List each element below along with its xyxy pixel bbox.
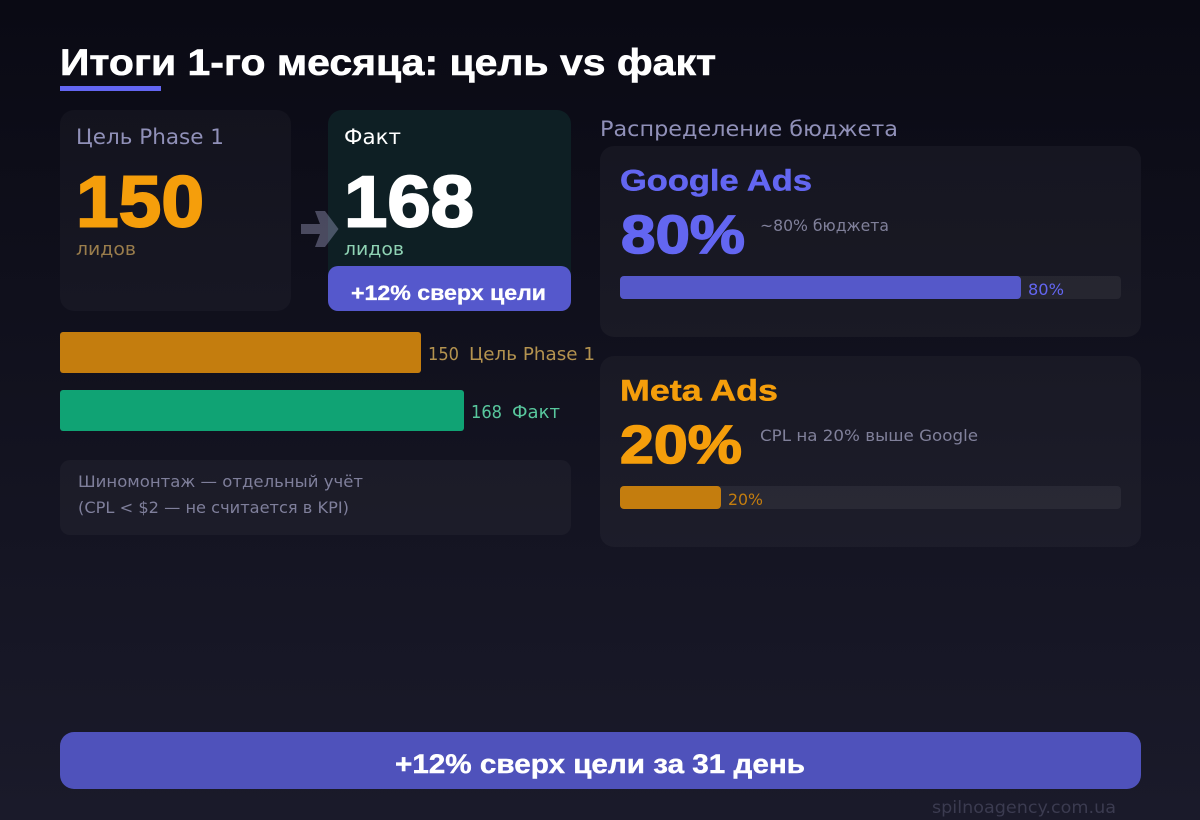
footer url: spilnoagency.com.ua <box>932 798 1116 818</box>
meta percent: 20% <box>620 415 742 475</box>
note panel: Шиномонтаж — отдельный учёт <box>78 472 363 491</box>
bar: actual: Факт <box>512 402 560 423</box>
goal unit: лидов <box>76 239 136 260</box>
actual unit: лидов <box>344 239 404 260</box>
summary banner: +12% сверх цели за 31 день <box>395 749 805 779</box>
panel: goal card <box>60 110 291 311</box>
actual value: 168 <box>344 162 474 242</box>
note panel <box>60 460 571 535</box>
google note: ~80% бюджета <box>760 216 889 235</box>
arrow <box>301 211 338 247</box>
goal value: 150 <box>76 162 204 242</box>
summary banner <box>60 732 1141 789</box>
badge: +12% сверх цели <box>351 282 546 305</box>
meta bar <box>620 486 1121 509</box>
meta bar: 20% <box>728 490 763 509</box>
actual label: Факт <box>344 125 401 149</box>
badge <box>328 266 571 311</box>
panel: actual card <box>328 110 571 311</box>
google bar <box>620 276 1121 299</box>
bar: goal: Цель Phase 1 <box>469 344 595 365</box>
bar: goal <box>60 332 595 373</box>
meta note: CPL на 20% выше Google <box>760 426 978 445</box>
note panel: (CPL < $2 — не считается в KPI) <box>78 498 349 517</box>
bar: goal: 150 <box>428 344 459 365</box>
bar: actual: 168 <box>471 402 502 423</box>
panel: meta ads <box>600 356 1141 547</box>
budget heading: Распределение бюджета <box>600 117 898 141</box>
title: Итоги 1-го месяца: цель vs факт <box>60 42 716 83</box>
google percent: 80% <box>621 205 745 265</box>
google name: Google Ads <box>620 164 812 198</box>
meta name: Meta Ads <box>620 374 778 408</box>
google bar: 80% <box>1028 280 1064 299</box>
goal label: Цель Phase 1 <box>76 125 224 149</box>
panel: google ads <box>600 146 1141 337</box>
bar: actual <box>60 390 560 431</box>
